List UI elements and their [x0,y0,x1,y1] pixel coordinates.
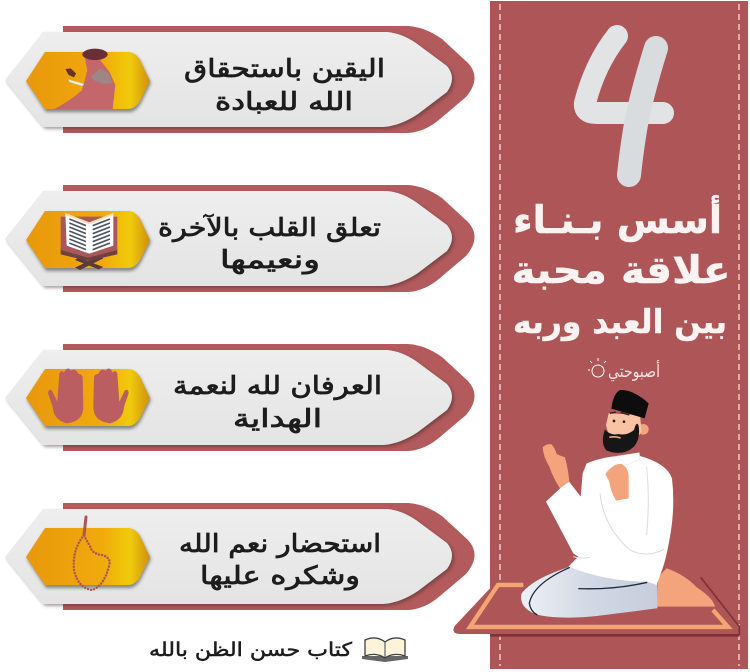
card 4 text [179,529,381,591]
title line 1: أسس بـنـاء [513,195,722,242]
line 2: الهداية [233,404,322,434]
card 3 text [173,371,382,434]
trouser seams [529,567,647,615]
card 1 arrow shadow [7,34,454,129]
face [606,413,642,445]
stitched border left [499,4,501,666]
card 4 maroon back [63,503,475,610]
card 1 text [184,54,385,116]
title line 3: بين العبد وربه [513,302,727,342]
panel background [490,1,748,669]
line 2: وشكره عليها [200,561,360,591]
card 3 arrow shadow [7,352,454,447]
robe folds [573,467,664,558]
card 1 maroon back [63,26,475,133]
foot [657,568,715,607]
card 4 hexagon shadow [27,530,151,588]
robe [546,456,673,585]
cap [611,390,649,418]
card 2 gold hexagon [26,211,150,268]
icon: open book [362,638,408,662]
beard [603,424,639,453]
card 2 light arrow [5,191,452,286]
card 4 gold hexagon [26,528,150,585]
card 2 arrow shadow [7,193,454,288]
line 1: العرفان لله لنعمة [173,371,382,400]
hand on chest [605,464,629,501]
eyebrows [610,412,629,415]
stitched border right [738,4,740,666]
mouth [609,437,621,438]
card 4 light arrow [5,509,452,604]
card 1 gold hexagon [26,52,150,109]
praying man on rug [453,390,739,637]
right panel [453,1,748,669]
card 4: remembering blessings [5,503,475,610]
line 1: استحضار نعم الله [179,529,381,559]
source text: كتاب حسن الظن بالله [149,639,353,661]
card 3 light arrow [5,350,452,445]
card 3: gratitude for guidance [5,344,475,451]
logo [588,358,660,382]
source note [149,638,408,662]
card 1 hexagon shadow [27,54,151,112]
card 3 gold hexagon [26,369,150,426]
card 1 light arrow [5,32,452,127]
card 4 arrow shadow [7,511,454,606]
line 1: اليقين باستحقاق [184,54,385,83]
card 2 hexagon shadow [27,213,151,271]
big number 4 [585,36,663,175]
card 3 hexagon shadow [27,371,151,429]
title line 2: علاقة محبة [512,248,730,292]
card 2: heart attached to hereafter [5,185,475,292]
icon: open book on stand [61,213,117,270]
card 3 maroon back [63,344,475,451]
line 1: تعلق القلب بالآخرة [158,213,381,242]
eyes [613,420,625,423]
line 2: ونعيمها [220,245,320,275]
icon: raised hands [48,368,129,423]
line 2: الله للعبادة [215,87,353,116]
icon: worshipper [53,49,115,109]
panel title [512,195,730,342]
icon: prayer beads [74,517,110,590]
raised hand [543,444,569,488]
prayer rug [453,577,739,637]
ear [638,424,649,435]
trousers [521,567,657,618]
collar [617,453,640,465]
logo: أصبوحتي [608,360,660,382]
card 2 maroon back [63,185,475,292]
card 1: certainty of worship [5,26,475,133]
card 2 text [158,213,381,275]
